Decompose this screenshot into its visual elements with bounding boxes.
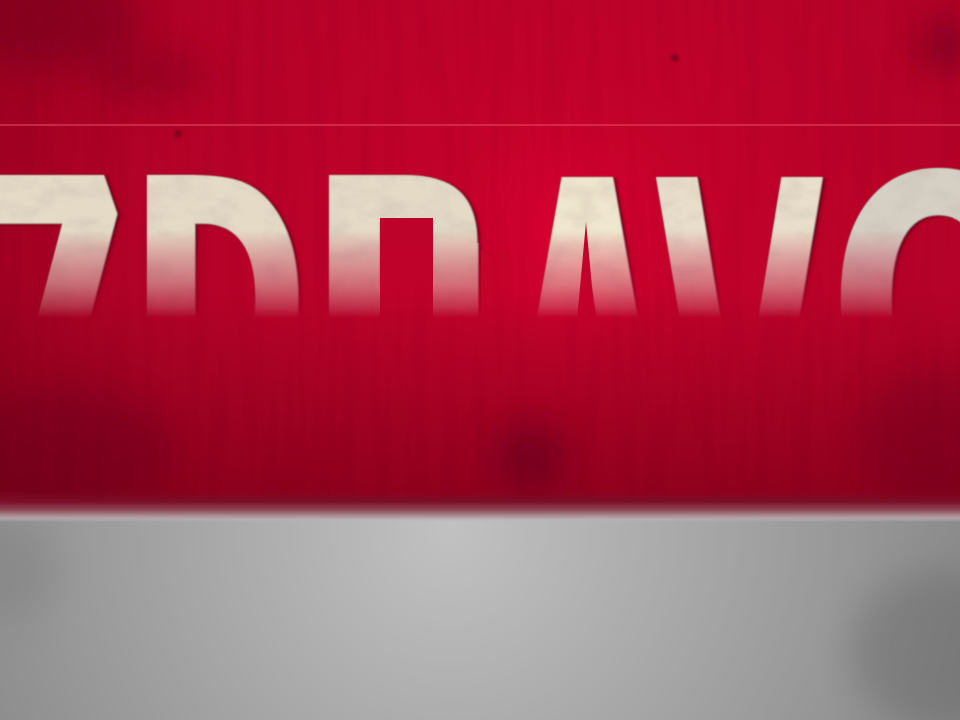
letter R xyxy=(328,174,483,316)
letter R: R xyxy=(305,107,507,504)
blurred edge between wall and floor xyxy=(0,491,960,522)
letter V: V xyxy=(655,81,825,640)
counter of letter A xyxy=(578,222,593,316)
panel: grey concrete floor xyxy=(0,518,960,720)
horizontal rule xyxy=(0,124,960,126)
letter D: D xyxy=(127,107,310,504)
title: ZDRAVO, cut off below the letters' middle xyxy=(0,166,960,316)
space right of letter R xyxy=(481,250,482,308)
counter of letter R xyxy=(380,218,433,316)
letter A: A xyxy=(499,81,677,641)
panel: red wall xyxy=(0,0,960,525)
letter D xyxy=(146,174,302,316)
